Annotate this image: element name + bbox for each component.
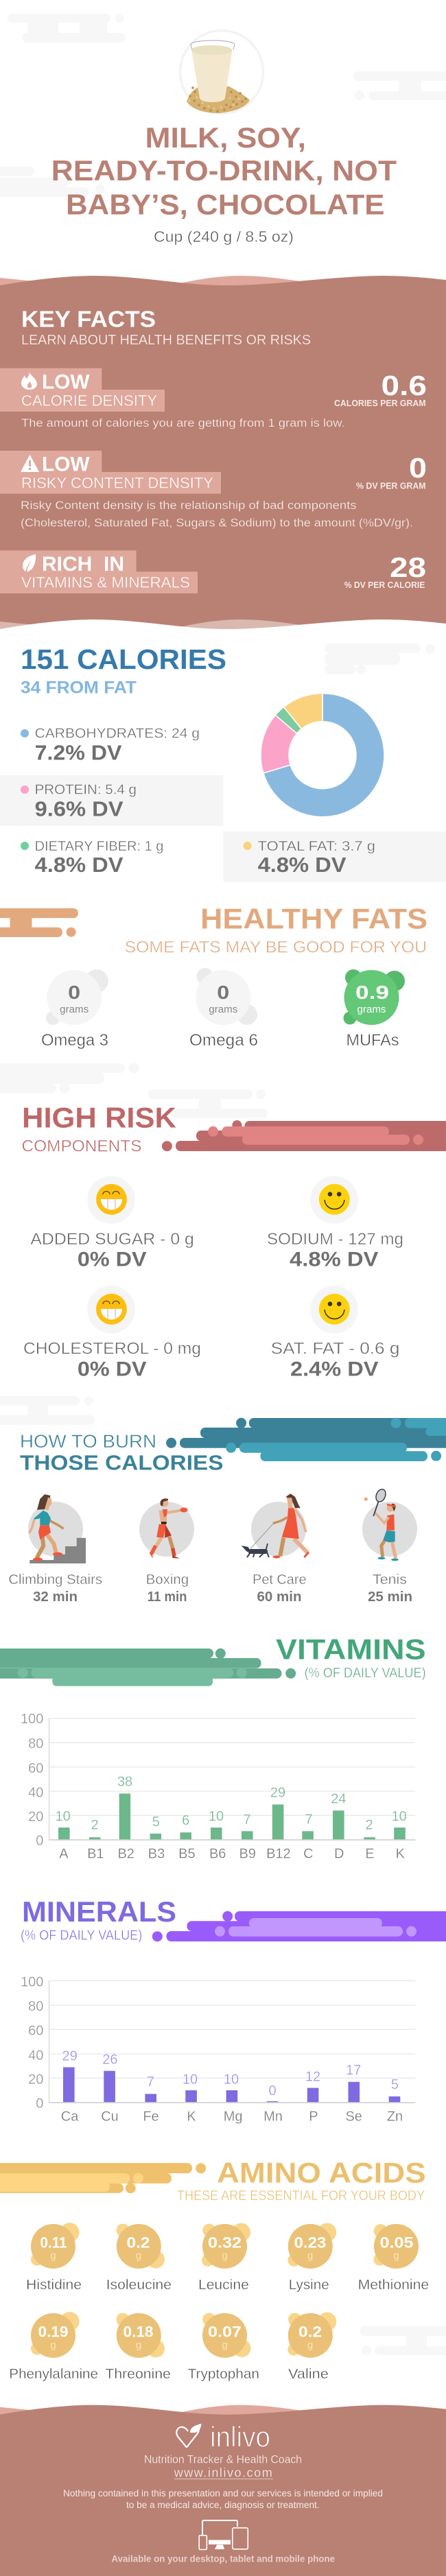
title — [51, 121, 397, 221]
tryptophan: 0.07 — [208, 2324, 242, 2341]
fact: risky content density: % DV PER GRAM — [356, 481, 426, 491]
heading: VITAMINS — [276, 1633, 426, 1665]
activity: tennis: Tenis — [373, 1572, 407, 1587]
lysine: Lysine — [289, 2278, 329, 2293]
sodium — [267, 1176, 403, 1271]
panel: minerals — [21, 1895, 446, 2125]
bar chart: minerals: Ca — [61, 2110, 79, 2125]
disclaimer — [63, 2488, 383, 2510]
fact: risky content density: (Cholesterol, Saturated Fat, Sugars & Sodium) to the amount (%DV/gr). — [21, 516, 413, 529]
tryptophan: Tryptophan — [188, 2367, 259, 2382]
title: READY-TO-DRINK, NOT — [51, 154, 397, 187]
legend: total fat: TOTAL FAT: 3.7 g — [258, 839, 375, 854]
bar chart: minerals: Fe — [143, 2110, 159, 2125]
website link: www.inlivo.com — [174, 2466, 272, 2479]
heading: THOSE CALORIES — [20, 1451, 224, 1475]
icon: woman climbing stairs — [28, 1494, 86, 1563]
bar chart: vitamins: 7 — [243, 1812, 251, 1828]
decoration: high risk bars — [162, 1120, 446, 1151]
bar chart: vitamins — [21, 1712, 415, 1861]
lysine: g — [307, 2250, 313, 2262]
bar chart: vitamins: 6 — [182, 1813, 189, 1828]
bar chart: vitamins: 2 — [91, 1818, 99, 1833]
decoration: green bars — [0, 1649, 296, 1686]
fact: calorie density: CALORIES PER GRAM — [334, 399, 426, 408]
bar chart: minerals: Mg — [224, 2110, 242, 2125]
activity: pet care: Pet Care — [253, 1572, 307, 1587]
omega 6: 0 — [217, 982, 229, 1003]
bar chart: vitamins: B3 — [148, 1846, 165, 1861]
availability note: Available on your desktop, tablet and mobile phone — [111, 2553, 335, 2564]
disclaimer: to be a medical advice, diagnosis or treatment. — [126, 2500, 320, 2510]
threonine: Threonine — [105, 2367, 171, 2382]
mufas: 0.9 — [355, 982, 389, 1003]
mufas — [343, 969, 405, 1050]
bar chart: minerals: 40 — [28, 2048, 43, 2063]
title: BABY’S, CHOCOLATE — [66, 189, 384, 221]
bar chart: vitamins: K — [396, 1846, 406, 1861]
cholesterol: CHOLESTEROL - 0 mg — [23, 1339, 201, 1358]
icon: smiling face — [310, 1176, 358, 1224]
legend: total fat: 4.8% DV — [258, 853, 347, 877]
bar chart: vitamins: 80 — [28, 1736, 43, 1751]
panel: high risk components — [22, 1101, 446, 1380]
fact: rich in vitamins and minerals: % DV PER CALORIE — [344, 580, 425, 590]
decoration: healthy fats bars — [0, 908, 78, 937]
legend: protein: 9.6% DV — [35, 796, 124, 820]
fact: rich in vitamins and minerals: VITAMINS & MINERALS — [21, 574, 190, 591]
bar chart: vitamins: 100 — [21, 1712, 43, 1727]
heading: HIGH RISK — [22, 1101, 176, 1133]
bar chart: vitamins: B6 — [209, 1846, 226, 1861]
activity: boxing: Boxing — [146, 1572, 189, 1587]
subheading: SOME FATS MAY BE GOOD FOR YOU — [125, 938, 427, 956]
bar chart: vitamins: 7 — [305, 1812, 313, 1827]
icon: grinning face — [87, 1176, 135, 1224]
bar chart: minerals: 12 — [305, 2069, 320, 2084]
activity: climbing stairs: Climbing Stairs — [8, 1572, 102, 1587]
bar chart: minerals — [21, 1974, 415, 2125]
histidine: Histidine — [26, 2278, 82, 2293]
threonine: 0.18 — [124, 2324, 154, 2341]
bar chart: minerals: 29 — [62, 2048, 78, 2064]
bar chart: minerals: 10 — [183, 2072, 198, 2087]
histidine — [26, 2223, 82, 2293]
legend: protein: PROTEIN: 5.4 g — [35, 783, 137, 798]
subheading: (% OF DAILY VALUE) — [305, 1666, 426, 1681]
activity: climbing stairs: 32 min — [33, 1590, 78, 1605]
title: MILK, SOY, — [145, 121, 306, 154]
bar chart: vitamins: 24 — [331, 1792, 347, 1807]
isoleucine — [106, 2224, 172, 2293]
fact: calorie density: LOW — [42, 371, 90, 394]
icon: warning triangle — [21, 455, 39, 472]
donut chart — [261, 694, 384, 817]
panel: vitamins — [0, 1633, 426, 1861]
bar chart: vitamins: A — [59, 1846, 69, 1861]
fact: risky content density: LOW — [42, 453, 90, 476]
activity: boxing: 11 min — [148, 1590, 187, 1605]
added sugar — [30, 1176, 194, 1271]
valine: Valine — [288, 2367, 329, 2382]
legend: dietary fiber: 4.8% DV — [35, 853, 124, 877]
activity: boxing — [139, 1498, 194, 1605]
fact: risky content density: 0 — [409, 452, 427, 484]
bar chart: minerals: K — [187, 2110, 196, 2125]
bar chart: minerals: Cu — [101, 2110, 119, 2125]
omega 6: Omega 6 — [189, 1031, 258, 1050]
leucine — [198, 2223, 250, 2293]
bar chart: minerals: 20 — [28, 2072, 43, 2087]
fact: risky content density: Risky Content density is the relationship of bad components — [21, 499, 357, 512]
icon: leaf — [23, 554, 36, 571]
panel: key facts — [0, 276, 446, 640]
saturated fat: 2.4% DV — [290, 1358, 378, 1380]
heading: AMINO ACIDS — [217, 2157, 426, 2189]
decoration: yellow bars — [0, 2163, 206, 2193]
phenylalanine — [9, 2312, 98, 2382]
omega 6 — [189, 968, 258, 1050]
added sugar: ADDED SUGAR - 0 g — [30, 1230, 194, 1249]
histidine: g — [50, 2250, 56, 2262]
icon: woman walking dog — [242, 1493, 309, 1559]
bar chart: vitamins: B2 — [117, 1846, 134, 1861]
serving size subtitle: Cup (240 g / 8.5 oz) — [154, 228, 294, 246]
bar chart: vitamins: 10 — [55, 1809, 71, 1824]
tagline: Nutrition Tracker & Health Coach — [144, 2453, 302, 2466]
heading: HEALTHY FATS — [200, 902, 427, 934]
leucine: g — [222, 2250, 228, 2262]
bar chart: minerals: 17 — [346, 2063, 361, 2078]
fact: risky content density — [0, 451, 427, 529]
bar chart: vitamins: 20 — [28, 1809, 43, 1824]
bar chart: vitamins: 10 — [392, 1809, 407, 1824]
subheading: 34 from fat: 34 FROM FAT — [21, 678, 137, 698]
omega 3: grams — [60, 1004, 89, 1015]
fact: rich in vitamins and minerals — [0, 550, 426, 593]
valine: g — [307, 2339, 313, 2351]
icon: heart with leaf — [176, 2424, 202, 2448]
lysine — [287, 2223, 336, 2293]
bar chart: vitamins: B5 — [178, 1846, 196, 1861]
bar chart: minerals: 0 — [268, 2083, 277, 2099]
bar chart: minerals: Zn — [387, 2110, 403, 2125]
omega 3: Omega 3 — [41, 1031, 108, 1050]
icon: smiling face — [310, 1286, 358, 1334]
methionine: g — [393, 2250, 399, 2262]
subheading: LEARN ABOUT HEALTH BENEFITS OR RISKS — [21, 333, 311, 348]
subheading: COMPONENTS — [22, 1137, 141, 1155]
bar chart: vitamins: 29 — [270, 1786, 285, 1801]
bar chart: vitamins: 38 — [117, 1774, 132, 1789]
leucine: 0.32 — [208, 2234, 242, 2252]
cholesterol — [23, 1286, 201, 1380]
isoleucine: Isoleucine — [106, 2278, 172, 2293]
decoration: purple bars — [152, 1911, 446, 1941]
valine: 0.2 — [298, 2324, 322, 2341]
icon: flame — [21, 372, 37, 390]
bar chart: minerals: 100 — [21, 1974, 43, 1989]
heading: key facts: KEY FACTS — [21, 307, 156, 332]
heading — [20, 1431, 224, 1475]
fact: risky content density: RISKY CONTENT DENSITY — [21, 475, 213, 492]
bar chart: vitamins: 60 — [28, 1761, 43, 1776]
phenylalanine: 0.19 — [38, 2324, 69, 2341]
methionine: Methionine — [358, 2278, 429, 2293]
icon: grinning face — [87, 1286, 135, 1334]
heading: MINERALS — [22, 1895, 176, 1928]
legend: dietary fiber: DIETARY FIBER: 1 g — [35, 839, 163, 854]
saturated fat — [271, 1286, 399, 1380]
legend: carbohydrates — [21, 726, 200, 765]
bar chart: vitamins: E — [365, 1846, 375, 1861]
disclaimer: Nothing contained in this presentation and our services is intended or implied — [63, 2488, 383, 2498]
fact: rich in vitamins and minerals: RICH IN — [42, 553, 124, 576]
activity: pet care: 60 min — [257, 1590, 302, 1605]
methionine: 0.05 — [380, 2234, 413, 2252]
fact: calorie density: The amount of calories you are getting from 1 gram is low. — [21, 416, 345, 429]
bar chart: vitamins: C — [303, 1846, 314, 1861]
bar chart: minerals: 5 — [391, 2077, 399, 2092]
subheading: THESE ARE ESSENTIAL FOR YOUR BODY — [177, 2188, 425, 2203]
phenylalanine: Phenylalanine — [9, 2367, 98, 2382]
legend: carbohydrates: CARBOHYDRATES: 24 g — [35, 726, 200, 742]
fact: calorie density — [0, 368, 427, 429]
sodium: SODIUM - 127 mg — [267, 1230, 403, 1249]
decoration: teal bars — [166, 1418, 446, 1461]
bar chart: minerals: 7 — [147, 2075, 154, 2090]
tryptophan: g — [222, 2339, 228, 2351]
isoleucine: g — [136, 2250, 141, 2262]
panel: how to burn those calories — [8, 1418, 446, 1605]
omega 3 — [41, 969, 108, 1050]
logo: inlivo: inlivo — [210, 2421, 270, 2453]
threonine: g — [136, 2339, 141, 2351]
methionine — [358, 2224, 429, 2293]
saturated fat: SAT. FAT - 0.6 g — [271, 1339, 399, 1358]
bar chart: minerals: 10 — [224, 2072, 239, 2087]
bar chart: vitamins: D — [334, 1846, 344, 1861]
leucine: Leucine — [198, 2278, 249, 2293]
activity: pet care — [242, 1493, 309, 1605]
bar chart: minerals: P — [309, 2110, 318, 2125]
mufas: MUFAs — [346, 1031, 399, 1050]
tryptophan — [188, 2313, 259, 2382]
bar chart: vitamins: B9 — [239, 1846, 256, 1861]
fact: calorie density: CALORIE DENSITY — [21, 392, 157, 410]
header image: glass of soy milk — [180, 30, 263, 114]
icon: desktop, tablet and phone — [199, 2520, 248, 2549]
legend: protein — [21, 783, 137, 820]
threonine — [105, 2313, 171, 2382]
lysine: 0.23 — [294, 2234, 327, 2252]
isoleucine: 0.2 — [126, 2234, 150, 2252]
omega 3: 0 — [68, 982, 80, 1003]
bar chart: vitamins: B12 — [266, 1846, 291, 1861]
heading: 151 calories: 151 CALORIES — [21, 643, 226, 675]
subheading: (% OF DAILY VALUE) — [21, 1928, 142, 1943]
legend: total fat — [244, 839, 375, 877]
bar chart: minerals: 80 — [28, 1999, 43, 2014]
fact: calorie density: 0.6 — [382, 370, 427, 401]
added sugar: 0% DV — [78, 1248, 147, 1271]
bar chart: vitamins: B1 — [87, 1846, 104, 1861]
legend: dietary fiber — [21, 839, 163, 877]
icon: boxer — [139, 1498, 194, 1559]
activity: tennis: 25 min — [368, 1590, 412, 1605]
panel: calories and macronutrients — [0, 643, 446, 882]
bar chart: vitamins: 40 — [28, 1785, 43, 1800]
bar chart: minerals: Se — [345, 2110, 362, 2125]
activity: tennis — [362, 1488, 417, 1605]
bar chart: minerals: 60 — [28, 2024, 43, 2039]
cholesterol: 0% DV — [78, 1358, 147, 1380]
fact: rich in vitamins and minerals: 28 — [390, 552, 426, 583]
heading: HOW TO BURN — [20, 1431, 156, 1452]
phenylalanine: g — [50, 2339, 56, 2351]
panel: healthy fats — [0, 902, 427, 1050]
legend: carbohydrates: 7.2% DV — [35, 741, 122, 765]
bar chart: minerals: 0 — [36, 2096, 43, 2111]
bar chart: minerals: 26 — [102, 2052, 118, 2067]
valine — [287, 2312, 336, 2382]
bar chart: minerals: Mn — [263, 2110, 283, 2125]
panel: amino acids — [0, 2157, 429, 2382]
activity: climbing stairs — [8, 1494, 102, 1605]
bar chart: vitamins: 2 — [365, 1818, 373, 1833]
panel: footer — [0, 2405, 446, 2576]
mufas: grams — [357, 1004, 386, 1015]
bar chart: vitamins: 0 — [36, 1833, 43, 1848]
sodium: 4.8% DV — [290, 1248, 378, 1271]
bar chart: vitamins: 10 — [209, 1809, 224, 1824]
omega 6: grams — [209, 1004, 237, 1015]
icon: tennis player — [362, 1488, 417, 1561]
histidine: 0.11 — [40, 2234, 67, 2252]
bar chart: vitamins: 5 — [152, 1815, 160, 1830]
logo: inlivo — [176, 2421, 270, 2453]
